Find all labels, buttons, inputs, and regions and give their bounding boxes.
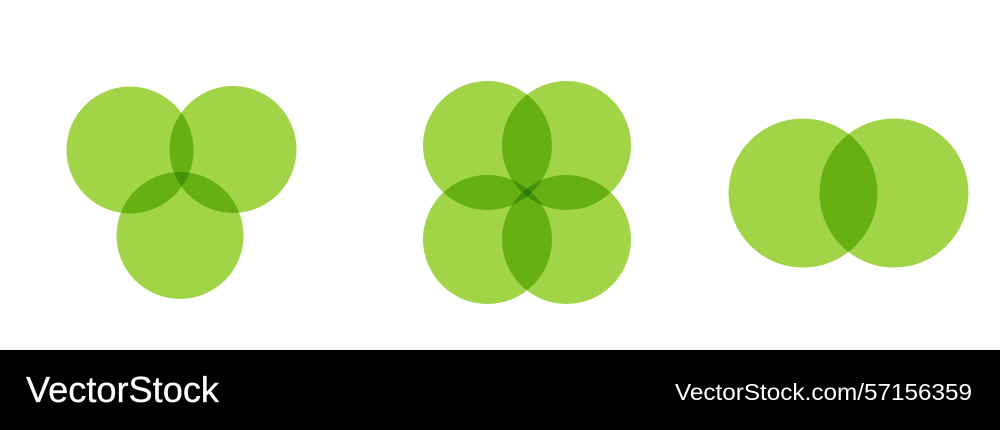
footer bar	[0, 350, 1000, 430]
diagram: four overlapping circles	[423, 81, 631, 304]
footer logo text: VectorStock	[26, 369, 220, 410]
footer image id text: VectorStock.com/57156359	[675, 379, 972, 405]
diagram: three overlapping circles	[66, 86, 296, 299]
diagram: two overlapping circles	[728, 118, 968, 268]
